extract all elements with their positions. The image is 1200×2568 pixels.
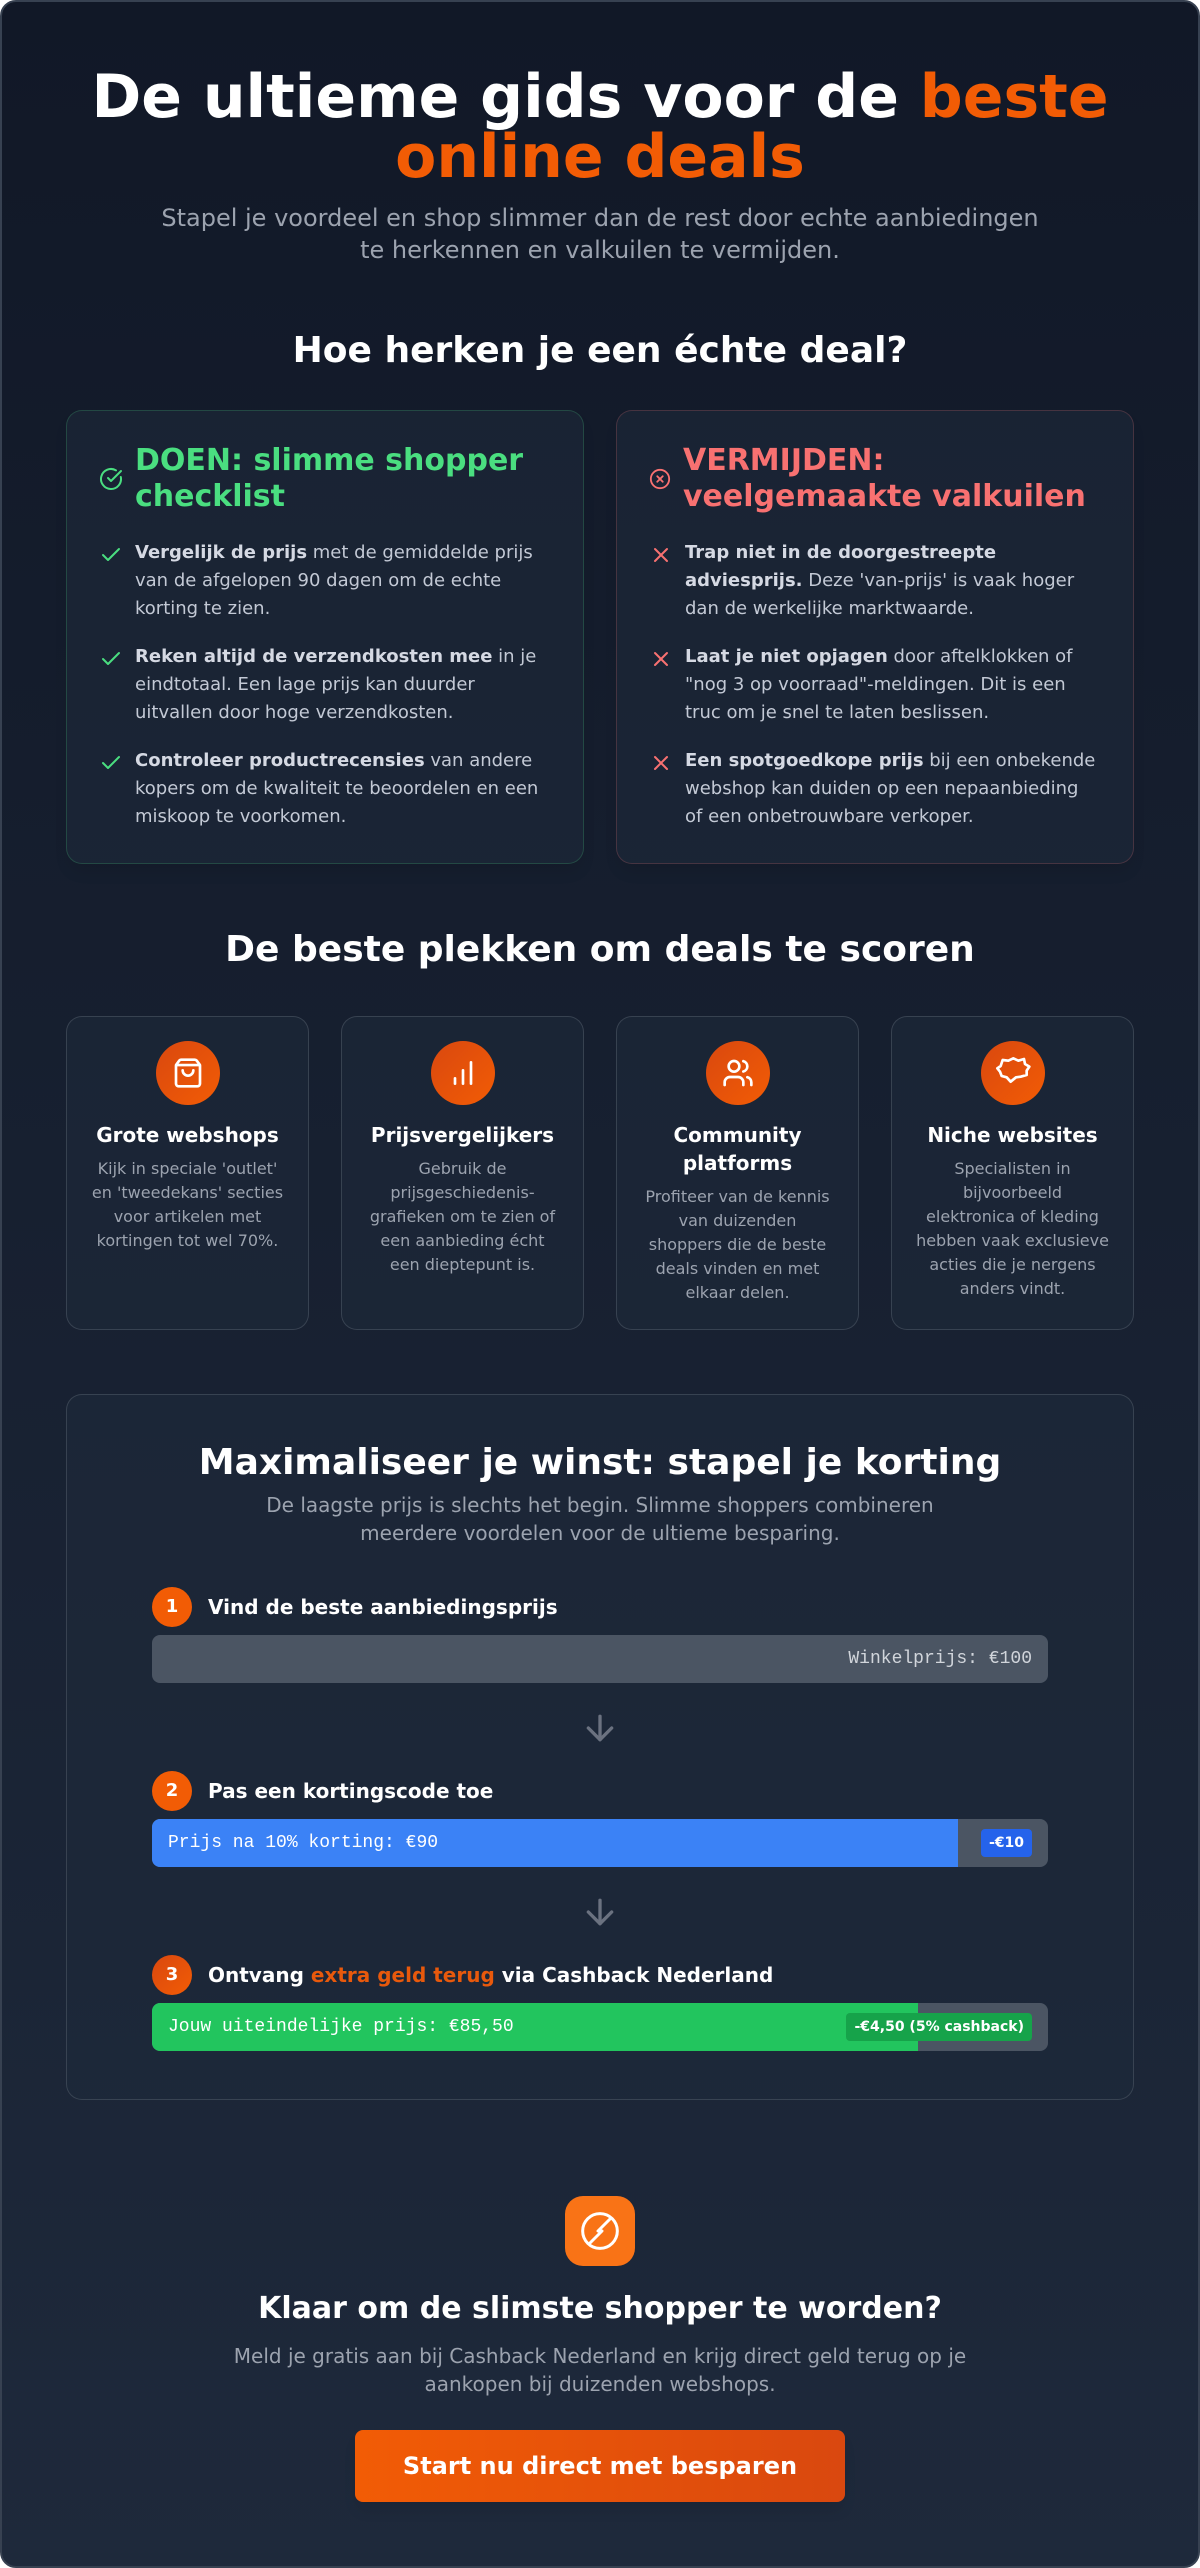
subtitle: te herkennen en valkuilen te vermijden.	[360, 236, 840, 264]
item: shipping costs: Reken altijd de verzendkosten mee in je	[135, 646, 536, 667]
bar: store price	[152, 1635, 1048, 1683]
item: too cheap: Een spotgoedkope prijs bij een onbekende	[685, 750, 1095, 771]
step 1: Vind de beste aanbiedingsprijs	[208, 1595, 558, 1619]
bar: after discount code: Prijs na 10% korting: €90	[168, 1833, 438, 1853]
step 1	[152, 1587, 1048, 1683]
item: urgency: truc om je snel te laten beslissen.	[685, 702, 989, 723]
step 3: Ontvang extra geld terug via Cashback Nederland	[208, 1963, 773, 1987]
step 2	[152, 1771, 1048, 1867]
item: urgency	[654, 646, 1073, 723]
card: niche websites: elektronica of kleding	[926, 1207, 1099, 1226]
panel heading: avoid: VERMIJDEN:	[683, 443, 884, 478]
item: compare price: Vergelijk de prijs met de gemiddelde prijs	[135, 542, 533, 563]
card: big webshops: Kijk in speciale 'outlet'	[98, 1159, 277, 1178]
bar: final price	[152, 2003, 1048, 2051]
panel: stack your discount	[66, 1394, 1134, 2100]
icon: bar chart	[430, 1041, 494, 1105]
card: community platforms: deals vinden en met	[656, 1259, 819, 1278]
item: compare price: korting te zien.	[135, 598, 270, 619]
card: community platforms: Profiteer van de kennis	[645, 1187, 830, 1206]
card: community platforms: van duizenden	[679, 1211, 796, 1230]
item: reviews: kopers om de kwaliteit te beoordelen en een	[135, 778, 538, 799]
item: shipping costs	[102, 646, 536, 723]
arrow: step 1 to 2	[586, 1714, 614, 1742]
step 2: 2	[166, 1780, 178, 1801]
card: niche websites: acties die je nergens	[929, 1255, 1096, 1274]
panel heading: do: checklist	[135, 479, 285, 514]
item: advisory price: Trap niet in de doorgestreepte	[685, 542, 996, 563]
subtitle	[161, 204, 1039, 264]
item: advisory price	[654, 542, 1074, 619]
panel heading: avoid	[650, 443, 1086, 514]
item: advisory price: adviesprijs. Deze 'van-prijs' is vaak hoger	[685, 570, 1074, 591]
panel: do checklist	[66, 410, 584, 864]
cta heading: Klaar om de slimste shopper te worden?	[258, 2291, 942, 2326]
card: niche websites: anders vindt.	[960, 1279, 1065, 1298]
card: community platforms: Community	[673, 1123, 802, 1147]
icon: users	[706, 1041, 770, 1105]
title	[91, 62, 1109, 192]
item: compare price: van de afgelopen 90 dagen om de echte	[135, 570, 501, 591]
title: De ultieme gids voor de beste	[91, 62, 1109, 132]
card: big webshops: Grote webshops	[96, 1123, 279, 1147]
stack intro: meerdere voordelen voor de ultieme besparing.	[360, 1521, 840, 1545]
card: niche websites: bijvoorbeeld	[963, 1183, 1062, 1202]
item: urgency: "nog 3 op voorraad"-meldingen. Dit is een	[685, 674, 1066, 695]
card: community platforms: platforms	[683, 1151, 792, 1175]
stack heading: Maximaliseer je winst: stapel je korting	[199, 1442, 1001, 1483]
item: shipping costs: eindtotaal. Een lage prijs kan duurder	[135, 674, 475, 695]
card: price comparison: Gebruik de	[419, 1159, 506, 1178]
item: compare price	[102, 542, 533, 619]
card: price comparison: een aanbieding écht	[380, 1231, 545, 1250]
panel heading: avoid: veelgemaakte valkuilen	[683, 479, 1086, 514]
cta button: Start nu direct met besparen	[403, 2452, 797, 2480]
panel heading: do: DOEN: slimme shopper	[135, 443, 523, 478]
section heading: real deal: Hoe herken je een échte deal?	[293, 330, 907, 371]
bar: after discount code	[152, 1819, 1048, 1867]
section heading: best places: De beste plekken om deals te scoren	[225, 929, 975, 970]
item: too cheap: webshop kan duiden op een nepaanbieding	[685, 778, 1078, 799]
card: big webshops: kortingen tot wel 70%.	[97, 1231, 278, 1250]
step 2: Pas een kortingscode toe	[208, 1779, 493, 1803]
icon: shopping bag	[156, 1041, 220, 1105]
bar: final price: -€4,50 (5% cashback)	[854, 2019, 1024, 2035]
card: big webshops	[66, 1016, 309, 1330]
bar: after discount code: -€10	[989, 1835, 1024, 1851]
arrow: step 2 to 3	[586, 1898, 614, 1926]
item: too cheap	[654, 750, 1095, 827]
step 3	[152, 1955, 1048, 2051]
stack intro: De laagste prijs is slechts het begin. Slimme shoppers combineren	[266, 1493, 934, 1517]
cta text: aankopen bij duizenden webshops.	[424, 2372, 776, 2396]
item: reviews: Controleer productrecensies van andere	[135, 750, 532, 771]
card: community platforms: shoppers die de beste	[649, 1235, 826, 1254]
card: niche websites	[891, 1016, 1134, 1330]
item: urgency: Laat je niet opjagen door aftelklokken of	[685, 646, 1073, 667]
card: community platforms: elkaar delen.	[685, 1283, 790, 1302]
step 3: 3	[166, 1964, 178, 1985]
step 1: 1	[166, 1596, 178, 1617]
title: online deals	[395, 122, 805, 192]
item: too cheap: of een onbetrouwbare verkoper.	[685, 806, 974, 827]
panel heading: do	[100, 443, 523, 514]
item: reviews	[102, 750, 538, 827]
bar: store price: Winkelprijs: €100	[848, 1649, 1032, 1669]
card: big webshops: en 'tweedekans' secties	[92, 1183, 283, 1202]
panel: avoid pitfalls	[616, 410, 1134, 864]
icon: cashback logo	[565, 2196, 635, 2266]
card: niche websites: hebben vaak exclusieve	[916, 1231, 1109, 1250]
card: price comparison: een dieptepunt is.	[390, 1255, 535, 1274]
card: niche websites: Specialisten in	[954, 1159, 1071, 1178]
item: reviews: miskoop te voorkomen.	[135, 806, 346, 827]
bar: final price: Jouw uiteindelijke prijs: €85,50	[168, 2017, 514, 2037]
icon: netherlands map	[980, 1041, 1044, 1105]
item: advisory price: dan de werkelijke marktwaarde.	[685, 598, 974, 619]
card: niche websites: Niche websites	[927, 1123, 1098, 1147]
card: community platforms	[616, 1016, 859, 1330]
cta button	[355, 2430, 845, 2502]
subtitle: Stapel je voordeel en shop slimmer dan de rest door echte aanbiedingen	[161, 204, 1039, 232]
stack intro	[266, 1493, 934, 1545]
card: big webshops: voor artikelen met	[114, 1207, 261, 1226]
cta text	[234, 2344, 966, 2396]
cta text: Meld je gratis aan bij Cashback Nederland en krijg direct geld terug op je	[234, 2344, 966, 2368]
item: shipping costs: uitvallen door hoge verzendkosten.	[135, 702, 454, 723]
card: price comparison: grafieken om te zien of	[370, 1207, 555, 1226]
card: price comparison: Prijsvergelijkers	[371, 1123, 554, 1147]
card: price comparison: prijsgeschiedenis-	[390, 1183, 535, 1202]
card: price comparison	[341, 1016, 584, 1330]
